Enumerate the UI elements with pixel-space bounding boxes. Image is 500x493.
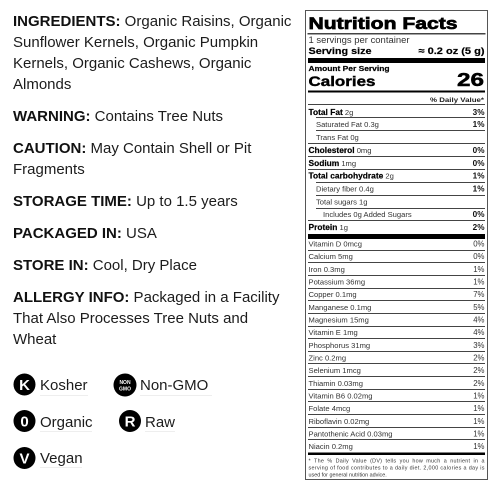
footnote: * The % Daily Value (DV) tells you how much a nutrient in a <box>308 458 484 464</box>
calories <box>308 66 484 90</box>
text block: packaged in: PACKAGED IN: USA <box>13 225 157 242</box>
macronutrient rows: 2% <box>473 223 485 232</box>
text block: ingredients: Sunflower Kernels, Organic Pumpkin <box>13 34 258 51</box>
badge: non-GMO: NON <box>119 380 131 386</box>
vitamin and mineral rows: 4% <box>473 328 485 337</box>
vitamin and mineral rows: 2% <box>473 366 485 375</box>
macronutrient rows: Saturated Fat 0.3g <box>316 120 379 129</box>
badge: non-GMO: Non-GMO <box>140 377 208 394</box>
footnote <box>308 458 485 478</box>
vitamin and mineral rows: Vitamin E 1mg <box>308 328 358 337</box>
vitamin and mineral rows: Niacin 0.2mg <box>308 442 353 451</box>
text block: allergy info: That Also Processes Tree Nuts and <box>13 310 248 327</box>
text block: caution: CAUTION: May Contain Shell or Pit <box>13 140 251 157</box>
serving information <box>308 35 484 57</box>
serving information: ≈ 0.2 oz (5 g) <box>418 46 484 57</box>
vitamin and mineral rows: 1% <box>473 417 485 426</box>
calories: Calories <box>308 73 376 89</box>
vitamin and mineral rows: Riboflavin 0.02mg <box>308 417 369 426</box>
vitamin and mineral rows: 7% <box>473 290 485 299</box>
footnote: serving of food contributes to a daily diet. 2,000 calories a day is <box>308 466 485 472</box>
vitamin and mineral rows: Potassium 36mg <box>308 278 365 286</box>
vitamin and mineral rows: 4% <box>473 316 485 324</box>
vitamin and mineral rows: 5% <box>473 303 485 312</box>
badge: organic: 0 <box>20 414 29 430</box>
badge: vegan: Vegan <box>40 450 83 467</box>
vitamin and mineral rows: Vitamin B6 0.02mg <box>308 392 373 400</box>
vitamin and mineral rows: 1% <box>473 392 485 400</box>
text block: ingredients: Almonds <box>13 76 71 93</box>
vitamin and mineral rows: 1% <box>473 404 485 413</box>
vitamin and mineral rows: 1% <box>473 430 485 438</box>
vitamin and mineral rows: Folate 4mcg <box>308 404 350 413</box>
macronutrient rows: 0% <box>473 210 485 219</box>
text block: store in: STORE IN: Cool, Dry Place <box>13 257 197 274</box>
vitamin and mineral rows <box>308 240 485 451</box>
vitamin and mineral rows: Iron 0.3mg <box>308 265 345 274</box>
macronutrient rows: Total Fat 2g <box>308 107 353 117</box>
macronutrient rows: 1% <box>473 120 485 129</box>
vitamin and mineral rows: Thiamin 0.03mg <box>308 379 363 388</box>
macronutrient rows: 0% <box>473 159 485 168</box>
badge: non-GMO <box>114 374 212 396</box>
panel: product information text <box>13 13 292 348</box>
badge: kosher <box>14 374 88 396</box>
vitamin and mineral rows: Magnesium 15mg <box>308 316 369 324</box>
macronutrient rows: Total carbohydrate 2g <box>308 170 394 180</box>
macronutrient rows: 1% <box>473 184 485 194</box>
vitamin and mineral rows: 0% <box>473 252 485 261</box>
macronutrient rows: Cholesterol 0mg <box>308 145 371 155</box>
badge: vegan: V <box>19 450 30 468</box>
badge: raw: Raw <box>145 414 175 431</box>
vitamin and mineral rows: 0% <box>473 240 485 248</box>
calories: Amount Per Serving <box>308 66 390 73</box>
vitamin and mineral rows: 3% <box>473 341 485 350</box>
vitamin and mineral rows: Selenium 1mcg <box>308 366 361 375</box>
heading: nutrition facts: Nutrition Facts <box>308 14 458 33</box>
text block: warning: WARNING: Contains Tree Nuts <box>13 108 223 125</box>
macronutrient rows <box>308 104 485 232</box>
vitamin and mineral rows: Calcium 5mg <box>308 252 353 261</box>
text block: ingredients: INGREDIENTS: Organic Raisins, Organic <box>13 13 291 30</box>
badge: non-GMO: GMO <box>119 386 131 392</box>
badge: raw <box>119 410 175 432</box>
vitamin and mineral rows: Zinc 0.2mg <box>308 354 346 362</box>
vitamin and mineral rows: Manganese 0.1mg <box>308 303 371 312</box>
text block: storage time: STORAGE TIME: Up to 1.5 years <box>13 193 238 210</box>
vitamin and mineral rows: Phosphorus 31mg <box>308 341 370 350</box>
vitamin and mineral rows: 1% <box>473 442 485 451</box>
macronutrient rows: 1% <box>473 172 485 180</box>
badge: kosher: K <box>19 377 30 394</box>
macronutrient rows: Dietary fiber 0.4g <box>316 184 374 194</box>
vitamin and mineral rows: 1% <box>473 265 485 274</box>
badge: organic: Organic <box>40 414 93 431</box>
macronutrient rows: Total sugars 1g <box>316 198 368 206</box>
panel: certification badges <box>14 374 212 469</box>
vitamin and mineral rows: 2% <box>473 354 485 362</box>
macronutrient rows: Trans Fat 0g <box>316 133 359 142</box>
badge: raw: R <box>125 414 136 430</box>
macronutrient rows: Sodium 1mg <box>308 158 356 168</box>
text block: allergy info: Wheat <box>13 331 57 348</box>
macronutrient rows: 3% <box>473 108 485 117</box>
vitamin and mineral rows: Copper 0.1mg <box>308 290 357 299</box>
text block: caution: Fragments <box>13 161 85 178</box>
vitamin and mineral rows: Pantothenic Acid 0.03mg <box>308 430 393 438</box>
serving information: Serving size <box>308 46 372 57</box>
macronutrient rows: Includes 0g Added Sugars <box>323 210 412 219</box>
macronutrient rows: 0% <box>473 146 485 155</box>
vitamin and mineral rows: 1% <box>473 278 485 286</box>
text block: ingredients: Kernels, Organic Cashews, Organic <box>13 55 252 72</box>
serving information: 1 servings per container <box>308 35 410 45</box>
panel: nutrition facts label <box>306 10 488 480</box>
calories: 26 <box>457 70 484 90</box>
footnote: used for general nutrition advice. <box>308 472 387 478</box>
macronutrient rows: Protein 1g <box>308 222 348 232</box>
daily value header: % Daily Value* <box>430 97 485 104</box>
text block: allergy info: ALLERGY INFO: Packaged in a Facility <box>13 289 279 306</box>
badge: organic <box>14 410 93 432</box>
badge: kosher: Kosher <box>40 377 88 394</box>
vitamin and mineral rows: 2% <box>473 379 485 388</box>
badge: vegan <box>14 447 83 469</box>
vitamin and mineral rows: Vitamin D 0mcg <box>308 240 362 248</box>
